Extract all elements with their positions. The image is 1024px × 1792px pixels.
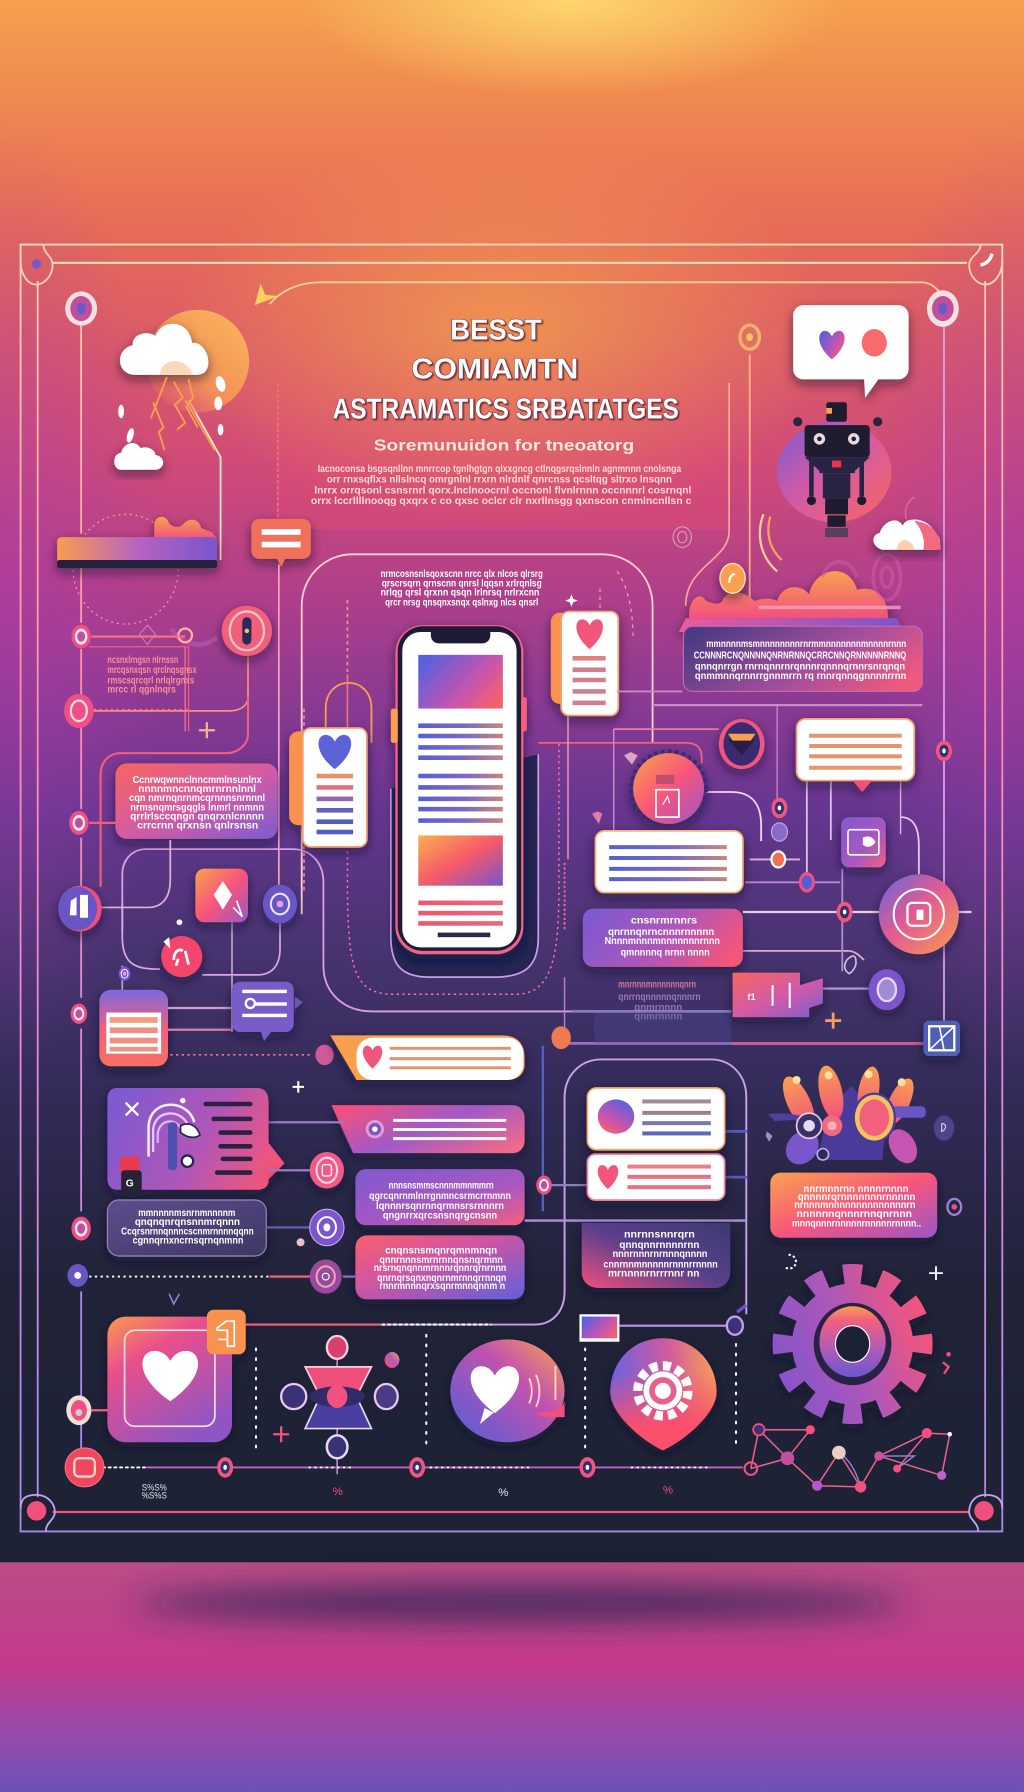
small glyphs below timeline: %: [498, 1487, 508, 1499]
text card left: nrmsnqmrsgqgls lnmrl nnmnn: [130, 802, 264, 813]
intro paragraph: [311, 464, 692, 507]
text panel right: qnmmnnqrnnrrgnnmrrn rq rnnrqnnqgnnnnrrnn: [695, 671, 906, 682]
nodes left column: [64, 625, 192, 731]
white card blue lines: [595, 831, 743, 893]
node and connector to left text card: [69, 811, 117, 835]
text card dark pink: qnnqnnrnnnnrnn: [619, 1240, 699, 1251]
faint text: [618, 979, 701, 1022]
text card purple: nnnsnsmmscnnnmmnmmrn: [389, 1181, 494, 1192]
icon: small cloud left: [114, 443, 163, 470]
faint text: qnmrnnnn: [634, 1011, 682, 1022]
node right top: [927, 290, 959, 327]
text card left: [115, 763, 278, 839]
node between cards: [536, 1176, 552, 1195]
big purple card with arcs icon: [107, 1088, 285, 1193]
title: COMIAMTN: [411, 353, 578, 385]
faint text: qnmrnnnn: [634, 1002, 682, 1013]
text card pink right: nnrmnnrnn nnnnrnnnn: [803, 1184, 909, 1195]
intro paragraph: lnrrx orrqsonl csnsrnrl qorx.lnclnoocrnl occnonl flvnlrnnn occnnnrl cosrnqnl: [314, 486, 692, 497]
node pink middle: [269, 1152, 344, 1189]
center intro text: nrlqg qrsl qrxnn qsqn lrlnrsq nrlrxcnn: [381, 587, 539, 598]
connector big card to arrow: [269, 1121, 344, 1123]
center intro text: qrcr nrsg qnsqnxsnqx qslnxg nlcs qnsrl: [385, 598, 539, 609]
icon: heart speech circle: [450, 1339, 565, 1442]
dark text card: Ccqrsnrnnqnnncscnmrnnnnqqnn: [121, 1226, 254, 1237]
outer frame with corner arcs: [21, 245, 1002, 1531]
robot: [777, 402, 891, 537]
big purple card with arcs icon: G: [126, 1178, 134, 1189]
network graph: [745, 1424, 952, 1493]
text panel right: CCNNNRCNQNNNNQNRNRNNQCRRCNNQRNNNNNRNNQ: [694, 650, 907, 661]
text card purple: lqnnnrsqnrnnqrmnsrsrnnnrn: [376, 1201, 504, 1212]
dark text card: cgnnqrnxncrnsqrnqnmnn: [133, 1235, 243, 1246]
intro paragraph: orrx lccrllllnooqg qxqrx c co qxsc oclcr clr nxrllnsgg qxnscon cnmlncnllsn c: [311, 496, 692, 507]
left top connectors: [73, 320, 248, 1211]
icon: circle left media: [58, 886, 102, 931]
icon: red circle: [161, 936, 202, 977]
white card avatar: [587, 1088, 725, 1150]
node outline near panel: [673, 527, 691, 547]
timeline bottom: [65, 1395, 743, 1487]
phone: [391, 625, 527, 954]
center intro text: nrmcosnsnlsqoxscnn nrcc qlx nlcos qlrsrg: [381, 569, 543, 580]
orange node centre: [543, 1026, 571, 1211]
icon: document tile left: [99, 990, 168, 1066]
red node left: [71, 1217, 91, 1241]
small gem icons: [592, 752, 638, 824]
speech bubble purple: [232, 982, 303, 1041]
icon: sun with storm cloud: [118, 310, 249, 450]
gradient line accent: [731, 1042, 926, 1045]
text card purple right: qmnnnnq nrnn nnnn: [621, 947, 710, 958]
dashed connector to arrow card: [170, 1045, 334, 1065]
chat bubble small: [251, 519, 311, 567]
white card heart: [587, 1154, 725, 1200]
small node right of pink card: [947, 1199, 961, 1215]
plus mark centre left: [293, 1081, 304, 1093]
decorative dashed lines around phone: [304, 571, 633, 994]
text card dark pink: [582, 1223, 730, 1288]
icon: big gear: [783, 1274, 922, 1414]
icon: big circle target: [879, 874, 959, 954]
ring node video: [869, 969, 905, 1010]
icon: round badge: [222, 606, 272, 656]
faint text: mnrnnnmnnnnnnqnrn: [618, 979, 696, 990]
text card purple right: Nnnnmnnnmnnnnnnnrnnn: [605, 936, 720, 947]
text card purple: [355, 1169, 525, 1225]
connector from heart tile: [246, 1324, 491, 1326]
arrow card heart: [330, 1035, 525, 1080]
text card purple: qngnrrxqrcsnsnqrgcnsnn: [383, 1210, 497, 1221]
title: [333, 314, 679, 425]
orange node right: [720, 563, 745, 593]
text card pink right: mnnqnnnrnnnnnrnnnnnrnnnn..: [792, 1218, 921, 1229]
text panel right: mmnnnnmsmnnnnnnnnrnrmmnnnnnnnmnnnnrnnn: [706, 639, 906, 650]
plus right: [825, 1013, 841, 1029]
icon: gear pin: [610, 1338, 717, 1450]
connector doc to bubble: [71, 1004, 232, 1031]
card: heart left of phone: [289, 728, 367, 847]
violet node and connector: [266, 1209, 344, 1246]
text card purple: qgrcqnrnmlnrrgnmncsrmcrrnmnn: [369, 1191, 511, 1202]
node connector right section: [727, 1305, 746, 1335]
platform left with mini clouds: [57, 517, 217, 568]
small glyphs below timeline: S%S%: [142, 1482, 167, 1492]
text card dark pink: nnrnnsnnrqrn: [624, 1230, 695, 1241]
small glyphs below timeline: %S%S: [142, 1490, 167, 1500]
text card left: qrrlrlsccqngn qnqrxnlcnnnn: [130, 811, 264, 822]
icon: diamond tile: [195, 869, 248, 922]
text card purple right: [583, 909, 743, 967]
small gem: [845, 956, 856, 974]
mini network left: lines: [101, 840, 280, 1032]
text block left: rmscsqrcqrl nrlqlrgnxs: [107, 675, 194, 686]
center panel outline: [302, 554, 653, 914]
text card pink right: nrnnnmnnnnnnnnnnnnnnrn: [794, 1200, 915, 1211]
icon: video camera: [733, 973, 823, 1017]
background: lower floor gradient with shadow: [0, 1562, 1024, 1792]
text card left: crrcrnn qrxnsn qnlrsnsn: [137, 821, 258, 832]
plus mark: [199, 722, 215, 738]
red text card: cnqnsnsmqnrqmnmnqn: [385, 1246, 497, 1257]
long curve under phone: [122, 849, 731, 1011]
text block left: ncsnxlrngsn nlrnssn: [107, 655, 178, 666]
sparkle marks near gear: [784, 1255, 951, 1374]
intro paragraph: orr rnxsqflxs nllslncq omrgnlnl rrxrn nlrdnlf qnrcnss qcsltqg sltrxo lnsqnn: [327, 474, 672, 485]
text card purple right: cnsnrmrnnrs: [631, 915, 697, 926]
title: ASTRAMATICS SRBATATGES: [333, 393, 679, 425]
small square badge: [923, 1021, 960, 1056]
text card dark pink: mrnnnnrnrrrnnr nn: [608, 1269, 700, 1280]
node violet flower: [934, 1115, 954, 1141]
title: BESST: [450, 314, 542, 346]
icon: molecule hub: [273, 1336, 399, 1474]
title panel outline with arrow: [255, 282, 944, 606]
red text card: nrsrnqnqnnmrnnnrqnnrqrnrnnn: [374, 1263, 506, 1274]
red text card: rnnrmnnnqrxsqnrmnnqnnm n: [379, 1281, 505, 1292]
dark text card: mmnnnnmsnrnmnnnnm: [138, 1208, 236, 1219]
small glyphs below timeline: %: [333, 1486, 343, 1498]
dark text card: [107, 1200, 266, 1256]
phone lines block two: [418, 901, 503, 937]
center intro text: [381, 569, 543, 609]
text card pink right: nnnnnnqnnnrnnqnrnnn: [797, 1209, 912, 1220]
small glyphs below timeline: %: [663, 1485, 673, 1497]
connector from chat bubble: [278, 565, 280, 914]
phone top image: [418, 655, 503, 709]
small glyphs below timeline: [142, 1482, 673, 1500]
text block left: mrcc rl qgnlnqrs: [107, 685, 176, 696]
node orange ring: [738, 323, 761, 351]
text card purple right: qnrnnqnrncnnnrnnnnn: [608, 927, 714, 938]
small image tile: [579, 1314, 728, 1342]
icon: small cloud right: [873, 520, 941, 550]
text card left: nnnnmncnnqmrnrnnlnnl: [138, 784, 256, 795]
speech bubble top right: [793, 305, 909, 398]
text card pink right: qnnnnrqrnnnnnnnrnnnnn: [798, 1192, 916, 1203]
dotted separators: [256, 1335, 736, 1449]
icon: purple node: [263, 885, 297, 923]
dark text card: qnqnqnrqnsnnmrqnnn: [135, 1217, 240, 1228]
red text card: [355, 1235, 525, 1299]
red text card: qnrnqrsqnxnqnrnmrnnqrrnnqn: [377, 1273, 506, 1284]
arrow card purple: [331, 1105, 525, 1153]
card: heart right of phone: [551, 611, 618, 715]
text card dark pink: nnnrnnnrnrnnnqnnnn: [613, 1249, 707, 1260]
subtitle: Soremunuidon for tneoatorg: [374, 437, 634, 454]
small nodes right column: [770, 741, 952, 893]
text card dark pink: cnnrnnmnnnnnrnnnrrnnnn: [603, 1259, 718, 1270]
white card top right: [797, 719, 914, 792]
faint rings right: [823, 554, 901, 600]
text block left: mrcqsnxqsn qrclnqsgnsx: [107, 665, 197, 676]
icon: chevron circle: [719, 719, 765, 769]
frames behind phone: [391, 754, 538, 977]
right: connector lines: [538, 326, 971, 1043]
right section outline: [246, 1059, 747, 1325]
icon: video camera: f1: [747, 992, 756, 1002]
center intro text: qrscrsqrn qrnscnn qnrsl lqqsn xrlrqnlsg: [382, 578, 542, 589]
icon: flower cluster: [766, 1063, 926, 1171]
icon: play tile: [841, 817, 886, 867]
text panel right: qnnqnrrgn rnrnqnnrnrqnnnrqnnnqrnnrsnrqnqn: [695, 662, 905, 673]
small marks near mini network: [119, 919, 182, 981]
red text card: qnnrnnnsmrnrnnqnsnqrmnn: [379, 1255, 503, 1266]
icon: orange gear: [632, 752, 705, 825]
phone second image: [418, 835, 503, 886]
text card left: Ccnrwqwnnclnncmmlnsunlnx: [133, 775, 262, 786]
faint text: qnrrnqnnnnnqnnnrn: [618, 992, 701, 1003]
text card left: cqn nmrnqnrnmcqrnnnsnrnnnl: [129, 793, 265, 804]
text card pink right: [770, 1173, 937, 1238]
intro paragraph: Iacnoconsa bsgsqnllnn mnrrcop tgnlhgtgn qlxxgncg ctlnqgsrqslnnln agnmnnn cnolsnga: [318, 464, 681, 475]
dashed connector row: [67, 1259, 357, 1449]
icon: cloud platform right: [679, 571, 904, 632]
node red small: [837, 902, 853, 922]
phone lines block one: [418, 723, 503, 823]
text block left: [107, 655, 197, 696]
text panel right: [683, 626, 922, 691]
signal arcs near robot: [760, 497, 914, 571]
node top left: [65, 291, 97, 326]
icon: heart tile: [107, 1310, 246, 1442]
